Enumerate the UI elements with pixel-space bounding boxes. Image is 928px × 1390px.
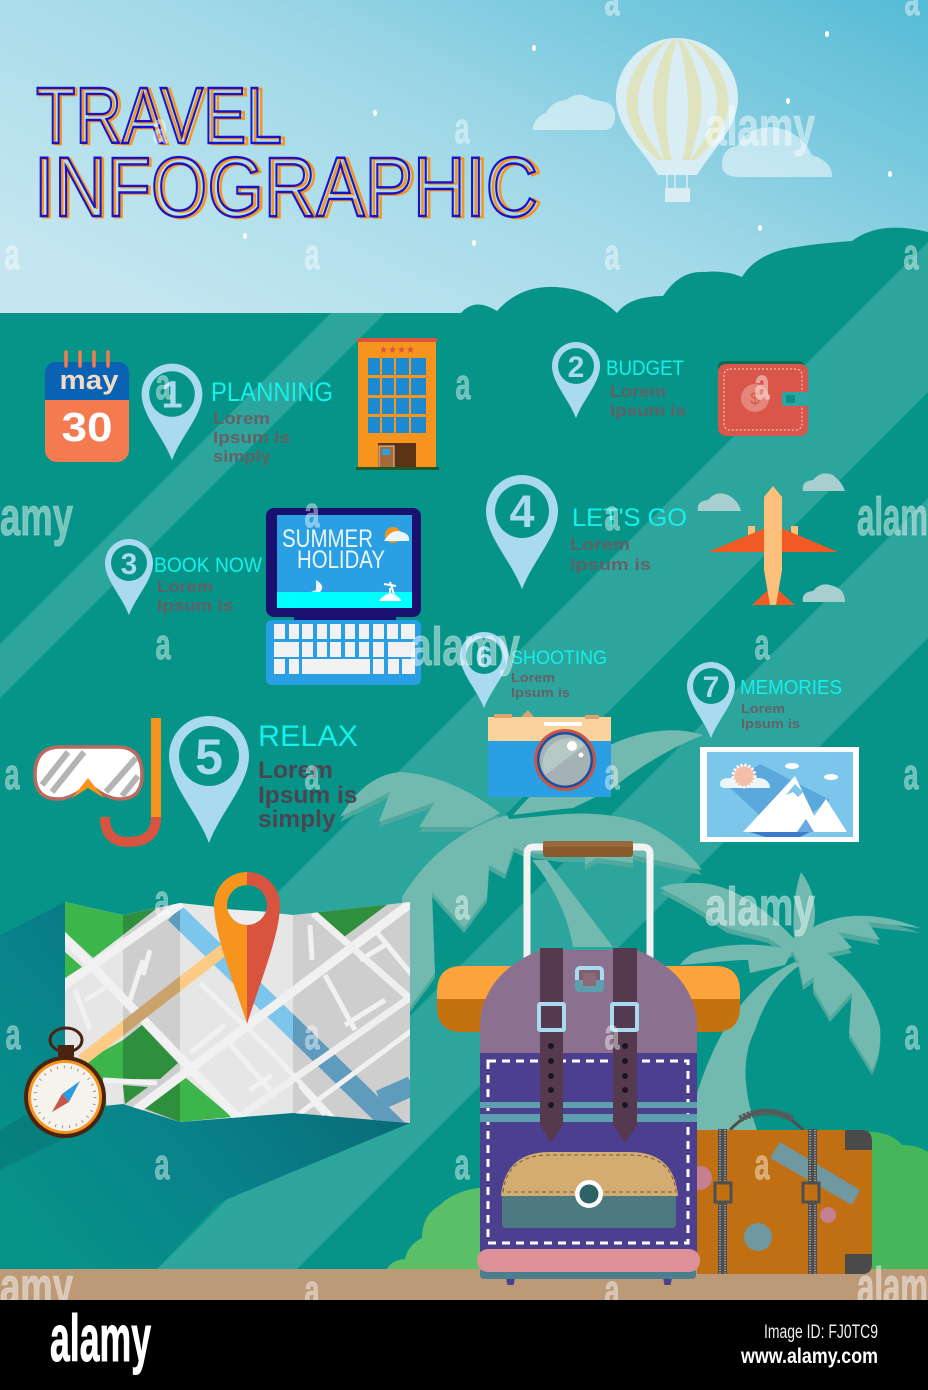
calendar icon bbox=[45, 352, 129, 462]
watermarks: a bbox=[604, 1266, 620, 1315]
body text bbox=[741, 702, 800, 731]
body text: Lorem bbox=[157, 578, 213, 596]
heading: shooting: SHOOTING bbox=[511, 648, 607, 669]
watermarks: a bbox=[304, 750, 320, 799]
pin 2: 2 bbox=[568, 351, 584, 384]
step 1: planning bbox=[142, 364, 333, 466]
watermarks: a bbox=[6, 1010, 21, 1059]
body text bbox=[157, 578, 233, 615]
body text bbox=[258, 757, 357, 833]
roads bbox=[60, 900, 415, 1120]
watermarks: a bbox=[304, 230, 320, 279]
centre clasp bbox=[575, 968, 604, 992]
body text bbox=[570, 535, 651, 574]
stars bbox=[243, 31, 892, 246]
body text bbox=[511, 671, 570, 700]
pin 1: 1 bbox=[161, 375, 183, 417]
body text: Lorem bbox=[570, 535, 630, 554]
palm shadow layer bbox=[340, 777, 702, 1012]
watermarks: amy bbox=[0, 1257, 73, 1317]
watermarks: a bbox=[454, 1140, 470, 1189]
body text: simply bbox=[213, 448, 272, 466]
luggage handle bbox=[527, 841, 650, 960]
palm tree right bbox=[660, 872, 920, 1130]
framed photo icon bbox=[700, 747, 859, 842]
watermarks: a bbox=[604, 230, 620, 279]
right bush bbox=[860, 1132, 928, 1269]
heading: planning: PLANNING bbox=[211, 377, 333, 407]
pack lid bbox=[480, 950, 697, 1053]
pin 6 bbox=[460, 632, 508, 708]
watermarks: a bbox=[304, 1010, 320, 1059]
body text: Lorem bbox=[213, 410, 270, 428]
calendar icon: may bbox=[60, 365, 118, 395]
watermarks: a bbox=[904, 230, 919, 279]
diving mask and snorkel icon bbox=[35, 718, 161, 842]
pink trim bbox=[477, 1249, 700, 1272]
heading: memories: MEMORIES bbox=[740, 677, 842, 699]
airplane icon with clouds bbox=[698, 473, 845, 605]
palm shadow layer bbox=[660, 888, 920, 1075]
step 2: budget bbox=[552, 342, 686, 420]
watermarks: a bbox=[154, 876, 170, 925]
sky background bbox=[0, 0, 928, 320]
teal hills ground bbox=[0, 220, 928, 1300]
step 3: book now bbox=[105, 539, 262, 615]
watermarks: a bbox=[754, 620, 770, 669]
body text: Lorem bbox=[511, 671, 555, 685]
laptop icon: SUMMER bbox=[282, 525, 373, 553]
watermarks: a bbox=[454, 104, 470, 153]
watermarks: a bbox=[454, 880, 470, 929]
watermarks: alamy bbox=[705, 97, 815, 157]
palm fronds and trunk bbox=[660, 872, 920, 1130]
backpack bbox=[437, 841, 740, 1285]
straps bbox=[540, 948, 637, 1143]
laptop icon bbox=[266, 508, 421, 685]
website: www.alamy.com bbox=[740, 1345, 878, 1368]
wheels bbox=[506, 1278, 672, 1285]
route bbox=[82, 948, 226, 1060]
body text: Lorem bbox=[741, 702, 785, 716]
stripes bbox=[480, 1102, 697, 1122]
pin 3: 3 bbox=[121, 548, 137, 581]
pin 7 bbox=[687, 662, 735, 738]
pack body bbox=[480, 1050, 697, 1255]
title: TRAVEL bbox=[38, 72, 286, 161]
bedroll bbox=[437, 966, 740, 1032]
pocket bbox=[501, 1152, 678, 1228]
watermarks: a bbox=[304, 488, 320, 537]
footer bar bbox=[0, 1300, 928, 1390]
pin 3 bbox=[105, 539, 153, 615]
title bbox=[34, 71, 542, 235]
watermarks: a bbox=[904, 750, 919, 799]
watermarks: a bbox=[4, 750, 20, 799]
cloud left bbox=[533, 95, 615, 130]
wallet icon bbox=[718, 361, 809, 436]
hotel icon bbox=[356, 338, 439, 470]
watermarks: alamy bbox=[410, 617, 520, 677]
river bbox=[175, 913, 412, 1130]
folded map bbox=[60, 895, 415, 1130]
title: INFOGRAPHIC bbox=[36, 141, 542, 235]
body text: Ipsum is bbox=[610, 402, 686, 420]
strap rivets bbox=[548, 1043, 628, 1108]
base bbox=[480, 1268, 696, 1279]
title: INFOGRAPHIC bbox=[34, 140, 538, 234]
footer logo: alamy bbox=[50, 1301, 151, 1375]
stitching bbox=[488, 1061, 688, 1243]
body text: Ipsum is bbox=[570, 555, 651, 574]
palm tree left bbox=[340, 730, 703, 1012]
watermarks: a bbox=[754, 1140, 770, 1189]
compass shadow bbox=[0, 1115, 65, 1170]
watermarks: a bbox=[156, 620, 171, 669]
step 5: relax bbox=[169, 716, 358, 843]
map long shadow bbox=[0, 902, 410, 1269]
watermarks: a bbox=[152, 104, 168, 153]
body text: Ipsum is bbox=[157, 597, 233, 615]
watermarks: a bbox=[604, 491, 620, 540]
bushes bbox=[387, 1132, 928, 1269]
watermarks: a bbox=[4, 230, 20, 279]
body text bbox=[610, 383, 686, 420]
cloud right bbox=[722, 127, 832, 177]
watermarks: a bbox=[156, 360, 171, 409]
hot air balloon bbox=[616, 38, 738, 202]
heading: let's go: LET'S GO bbox=[572, 504, 687, 532]
hotel icon: ★★★★ bbox=[379, 345, 415, 356]
pin 5: 5 bbox=[195, 729, 223, 785]
laptop icon: HOLIDAY bbox=[297, 546, 385, 574]
body text: simply bbox=[258, 806, 336, 833]
suitcase bbox=[688, 1111, 872, 1274]
pocket button bbox=[575, 1180, 603, 1208]
body text: Ipsum is bbox=[741, 717, 800, 731]
map pin bbox=[214, 872, 280, 1024]
pin 7: 7 bbox=[703, 671, 719, 704]
pin 4: 4 bbox=[509, 486, 535, 537]
heading: book now: BOOK NOW bbox=[154, 554, 262, 577]
green areas bbox=[60, 902, 232, 1122]
buckles bbox=[539, 1004, 637, 1030]
watermarks: a bbox=[604, 750, 620, 799]
pin 5 bbox=[169, 716, 249, 843]
pin 1 bbox=[142, 364, 202, 460]
body text bbox=[213, 410, 290, 466]
step 7: memories bbox=[687, 662, 842, 738]
ground bbox=[0, 1269, 928, 1300]
watermarks: a bbox=[304, 1266, 320, 1315]
watermarks: amy bbox=[0, 487, 73, 547]
title: TRAVEL bbox=[36, 71, 282, 160]
body text: Ipsum is bbox=[213, 429, 290, 447]
palm fronds bbox=[340, 730, 703, 1007]
watermarks: alamy bbox=[705, 877, 815, 937]
watermarks: a bbox=[456, 360, 471, 409]
step 4: let's go bbox=[486, 475, 687, 589]
compass bbox=[24, 1028, 106, 1138]
heading: budget: BUDGET bbox=[606, 357, 684, 380]
body text: Lorem bbox=[610, 383, 666, 401]
watermarks: a bbox=[754, 360, 770, 409]
watermarks: a bbox=[154, 1140, 170, 1189]
watermarks: a bbox=[604, 1010, 620, 1059]
body text: Ipsum is bbox=[258, 782, 357, 809]
body text: Lorem bbox=[258, 757, 333, 784]
left bush bbox=[387, 1187, 485, 1269]
pin 6: 6 bbox=[476, 641, 492, 674]
pin 4 bbox=[486, 475, 558, 589]
body text: Ipsum is bbox=[511, 686, 570, 700]
wallet icon: $ bbox=[750, 389, 760, 408]
step 6: shooting bbox=[460, 632, 607, 708]
calendar icon: 30 bbox=[62, 404, 112, 450]
image id: Image ID: FJ0TC9 bbox=[764, 1322, 878, 1343]
camera icon bbox=[488, 710, 611, 797]
heading: relax: RELAX bbox=[258, 720, 358, 753]
